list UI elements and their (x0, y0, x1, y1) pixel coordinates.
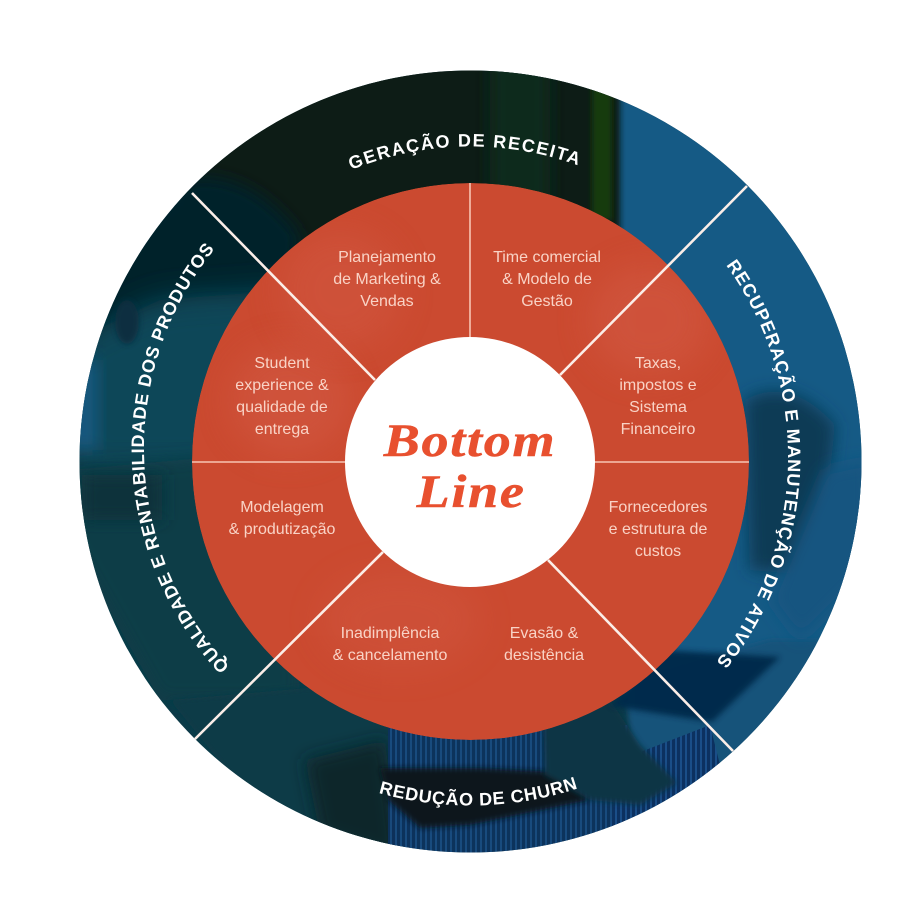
red inner ring (192, 183, 749, 740)
segment: Taxas, impostos e Sistema Financeiro: Financeiro (621, 421, 695, 438)
segment: Modelagem & produtização: & produtização (229, 521, 335, 538)
title: Bottom Line: Bottom (383, 414, 556, 466)
segment: Student experience & qualidade de entrega: experience & (235, 377, 329, 394)
segment: Time comercial & Modelo de Gestão: Gestão (521, 293, 573, 310)
title: Bottom Line (383, 414, 556, 517)
segment: Fornecedores e estrutura de custos: Fornecedores (609, 499, 707, 516)
segment: Student experience & qualidade de entrega: entrega (255, 421, 309, 438)
ring label: Redução de Churn: REDUÇÃO DE CHURN (380, 777, 577, 808)
segment: Planejamento de Marketing & Vendas: Planejamento (338, 249, 436, 266)
outer ring photo background (70, 60, 880, 860)
segment: Evasão & desistência: desistência (504, 647, 584, 664)
title: Bottom Line: Line (416, 465, 526, 517)
ring label: Geração de Receita: GERAÇÃO DE RECEITA (349, 133, 578, 168)
segment: Planejamento de Marketing & Vendas: de Marketing & (333, 271, 441, 288)
segment: Time comercial & Modelo de Gestão: & Modelo de (502, 271, 592, 288)
segment: Modelagem & produtização: Modelagem (240, 499, 324, 516)
ring label: Qualidade e Rentabilidade dos Produtos: QUALIDADE E RENTABILIDADE DOS PRODUTOS (132, 244, 227, 672)
segment: Time comercial & Modelo de Gestão: Time comercial (493, 249, 601, 266)
segment: Fornecedores e estrutura de custos: custos (635, 543, 681, 560)
segment: Planejamento de Marketing & Vendas: Vendas (360, 293, 414, 310)
segment: Fornecedores e estrutura de custos: e estrutura de (609, 521, 707, 538)
segment: Inadimplência & cancelamento: & cancelamento (333, 647, 447, 664)
segment: Student experience & qualidade de entrega: qualidade de (236, 399, 328, 416)
segment: Inadimplência & cancelamento: Inadimplência (341, 625, 439, 642)
segment: Evasão & desistência: Evasão & (510, 625, 578, 642)
segment: Taxas, impostos e Sistema Financeiro: impostos e (619, 377, 697, 394)
center circle (345, 337, 595, 587)
divider lines (192, 183, 749, 751)
segment: Taxas, impostos e Sistema Financeiro: Sistema (629, 399, 687, 416)
segment: Taxas, impostos e Sistema Financeiro: Taxas, (635, 355, 681, 372)
segment: Student experience & qualidade de entrega: Student (254, 355, 310, 372)
ring label: Recuperação e Manutenção de Ativos: RECUPERAÇÃO E MANUTENÇÃO DE ATIVOS (718, 259, 800, 668)
